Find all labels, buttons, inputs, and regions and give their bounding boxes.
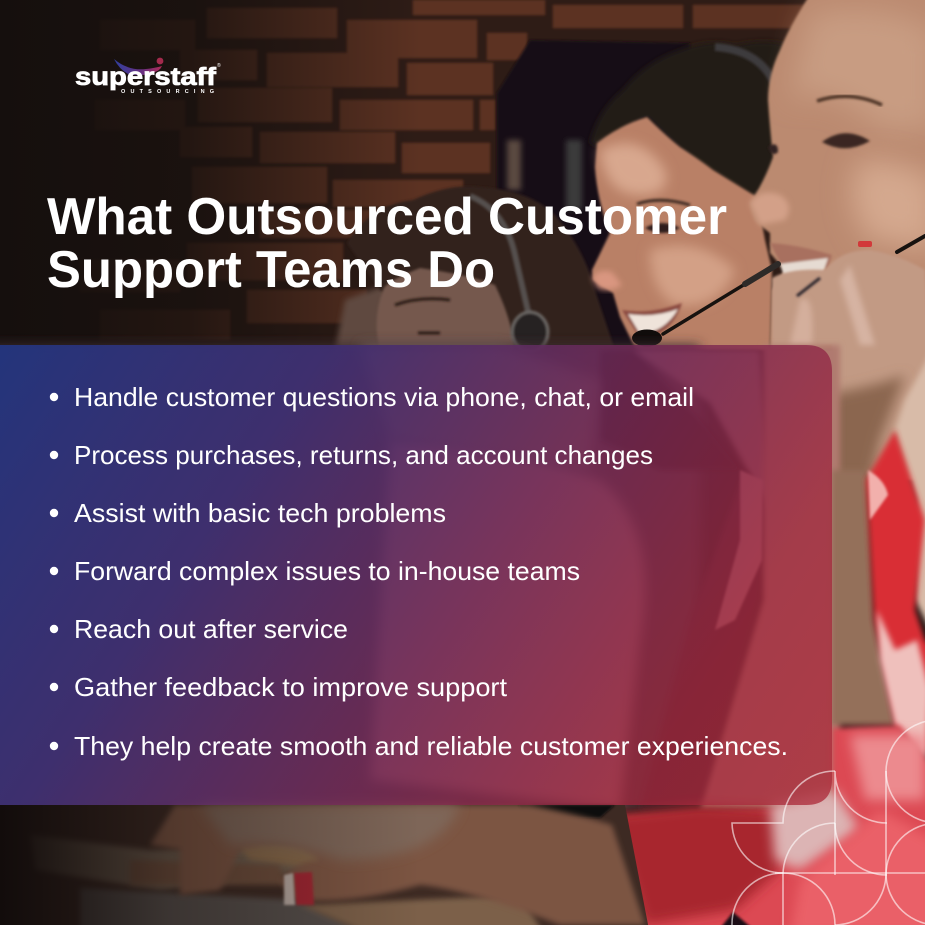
front agent hand at chin bbox=[772, 241, 925, 490]
middle agent eye and brow bbox=[637, 200, 690, 233]
list item 7: They help create smooth and reliable customer experiences. bbox=[74, 731, 788, 761]
middle agent face bbox=[592, 117, 772, 350]
skin of far agent bbox=[360, 345, 600, 470]
logo swoosh bbox=[114, 59, 162, 75]
hair of far agent under panel bbox=[600, 350, 740, 470]
front agent mouth bbox=[770, 243, 832, 278]
logo wordmark: superstaff bbox=[75, 63, 217, 91]
front agent eye and brow bbox=[768, 96, 882, 154]
logo: superstaff outsourcing bbox=[75, 58, 221, 95]
dark alcove behind agents bbox=[497, 40, 700, 345]
list item 2: Process purchases, returns, and account changes bbox=[74, 440, 653, 470]
middle agent hair bbox=[590, 42, 790, 240]
lace top of far agent bbox=[370, 440, 645, 810]
list item 3: Assist with basic tech problems bbox=[74, 498, 446, 528]
middle agent smile bbox=[622, 303, 682, 338]
brick wall bbox=[0, 0, 820, 360]
panel: list of support tasks bbox=[0, 345, 832, 805]
bullet list bbox=[50, 382, 788, 761]
alcove highlights bbox=[507, 140, 582, 210]
logo dot bbox=[157, 58, 163, 64]
logo tagline: OUTSOURCING bbox=[121, 89, 214, 95]
left shadow over desk bbox=[0, 805, 420, 925]
logo registered mark: ® bbox=[217, 62, 221, 69]
far agent headset bbox=[470, 196, 530, 320]
sleeve of middle agent bbox=[633, 350, 770, 510]
list item 5: Reach out after service bbox=[74, 614, 348, 644]
title: Support Teams Do bbox=[47, 241, 495, 299]
wrist of front agent bbox=[832, 470, 895, 725]
list item 1: Handle customer questions via phone, chat, or email bbox=[74, 382, 694, 412]
desk and keyboard bbox=[0, 805, 650, 925]
chest of front agent bbox=[895, 345, 925, 640]
decorative geometric line pattern bbox=[732, 720, 925, 925]
lower body region beneath the panel bbox=[0, 345, 700, 810]
list item 4: Forward complex issues to in-house teams bbox=[74, 556, 580, 586]
red sleeve and lower shirt bbox=[605, 725, 925, 925]
front agent face bbox=[750, 0, 925, 350]
rear agent face bbox=[335, 285, 390, 350]
arm of front agent under panel bbox=[700, 345, 840, 810]
far agent face bbox=[377, 268, 515, 350]
far agent hair bbox=[347, 186, 615, 350]
panel background bbox=[0, 345, 832, 805]
shirt placket bbox=[715, 470, 763, 630]
dark left shading bbox=[0, 0, 420, 350]
title: What Outsourced Customer bbox=[47, 188, 727, 246]
title bbox=[47, 188, 727, 299]
red shirt front bbox=[866, 430, 925, 760]
headset microphone boom and tip bbox=[632, 236, 925, 346]
list item 6: Gather feedback to improve support bbox=[74, 672, 508, 702]
hand and forearm on keyboard bbox=[150, 805, 645, 925]
